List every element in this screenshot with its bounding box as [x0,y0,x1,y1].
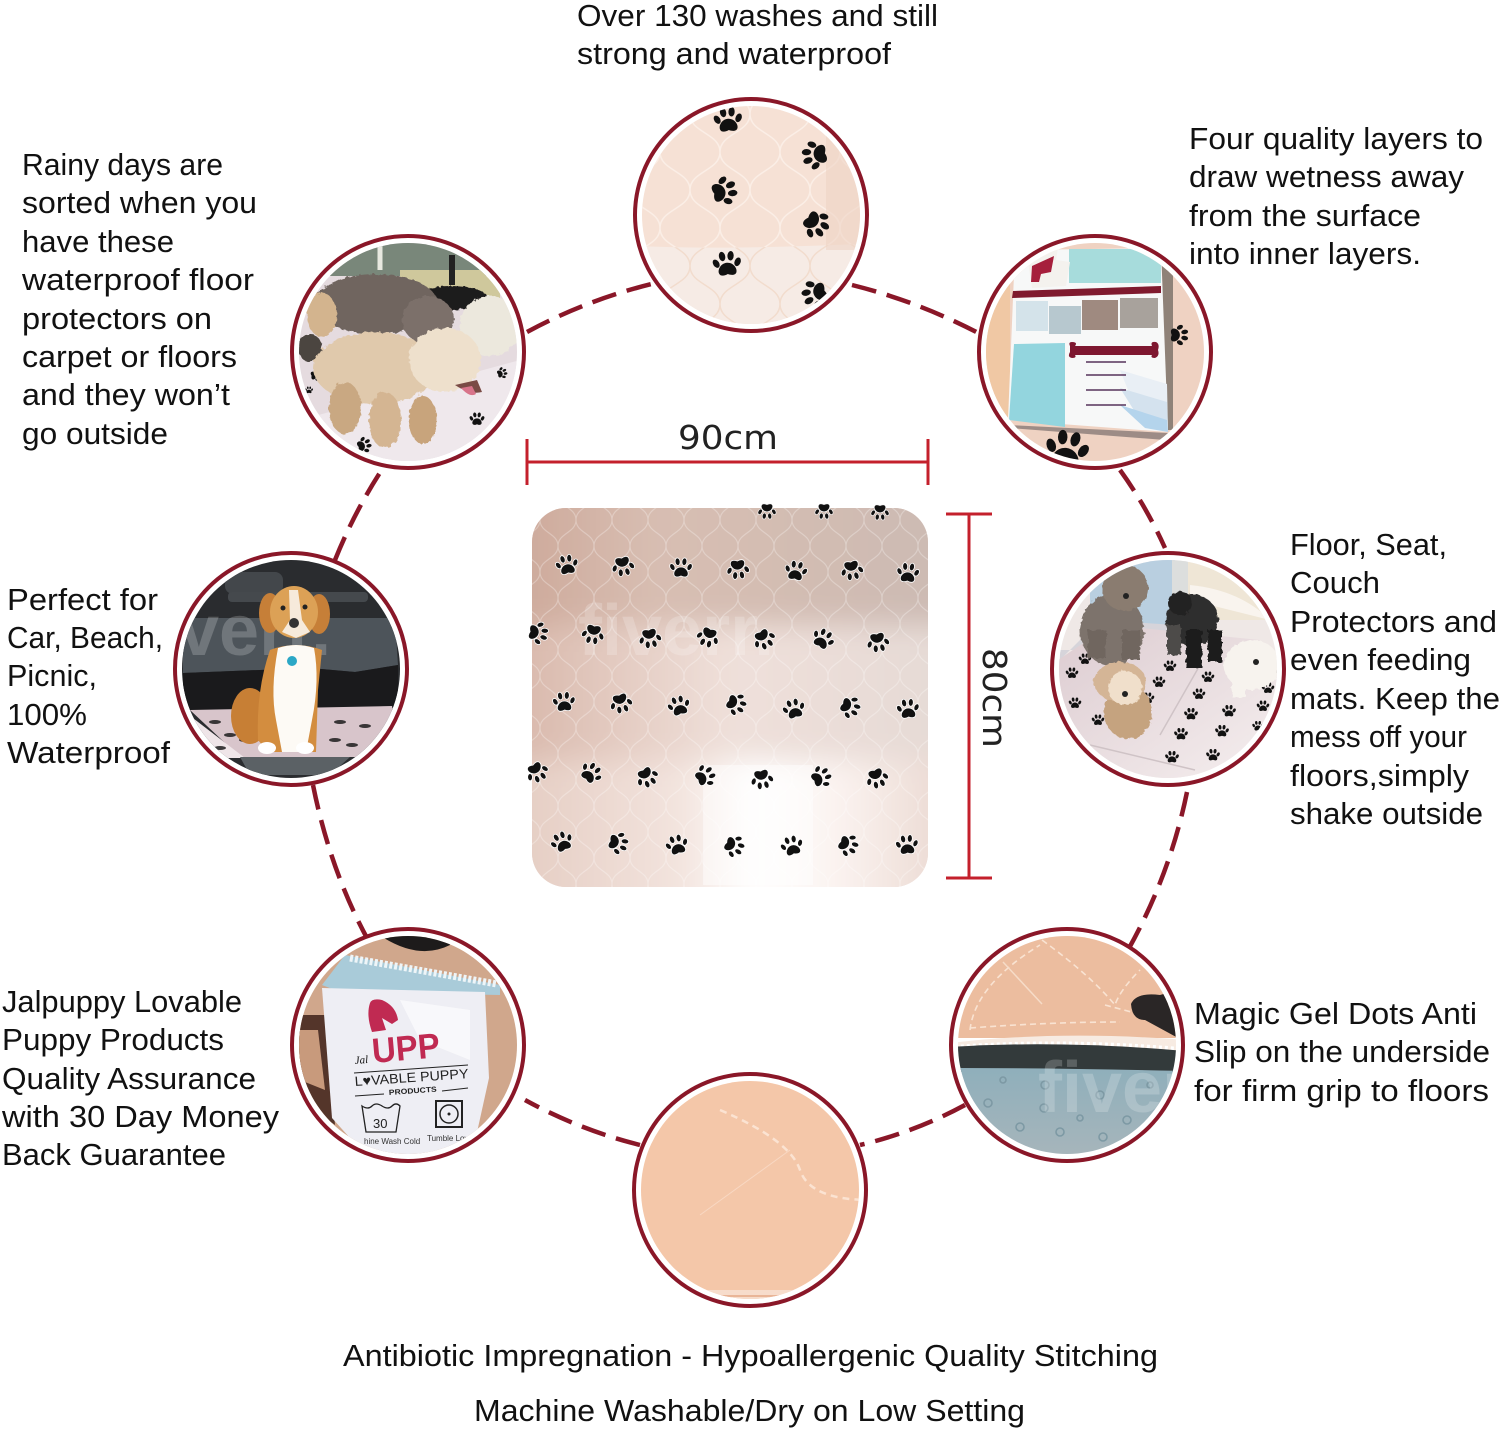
circle: product insert showing four layers [979,236,1211,471]
top left text: rainy days: waterproof floor [21,262,254,297]
left text: car beach picnic [7,582,170,770]
top left text: rainy days [21,147,257,451]
top text: washes: strong and waterproof [577,36,891,71]
top right text: layers: into inner layers. [1189,236,1421,271]
left text: car beach picnic: Car, Beach, [7,620,163,655]
brand logo [355,999,438,1064]
circle: plain peach fabric with stitching [634,1074,870,1310]
bottom left text: guarantee: Jalpuppy Lovable [2,984,242,1019]
height dimension: 80cm [946,514,1014,878]
bottom right text: gel dots [1194,996,1490,1108]
width dimension: 90cm: 90cm [678,418,778,457]
height dimension: 80cm: 80cm [975,648,1014,748]
products text: PRODUCTS [389,1085,437,1097]
circle: gel dots underside: fiverr. [1038,1048,1234,1128]
right text: floor seat couch: Floor, Seat, [1290,527,1447,562]
top left text: rainy days: protectors on [22,301,212,336]
central pad with paw print rows: fiverr. [578,591,774,671]
bottom right text: gel dots: Magic Gel Dots Anti [1194,996,1477,1031]
wash symbol: 30 [373,1116,387,1131]
circle: dogs on pad, poodles [292,236,524,470]
top left text: rainy days: have these [22,224,174,259]
top left text: rainy days: sorted when you [22,185,257,220]
right text: floor seat couch: Protectors and [1290,604,1497,639]
left text: car beach picnic: 100% [7,697,87,732]
bottom right text: gel dots: for firm grip to floors [1194,1073,1489,1108]
circle: quilted peach fabric with paws [630,99,870,331]
bottom right text: gel dots: Slip on the underside [1194,1034,1490,1069]
right text: floor seat couch: Couch [1290,565,1380,600]
width dimension: 90cm [527,418,928,485]
right text: floor seat couch: floors,simply [1290,758,1470,793]
wash symbol [362,1104,400,1132]
right text: floor seat couch [1290,527,1500,831]
bottom left text: guarantee: Quality Assurance [2,1061,256,1096]
circle: care label with brand: Tumble Low [427,1134,470,1143]
right text: floor seat couch: mess off your [1290,719,1467,754]
top right text: layers: draw wetness away [1189,159,1465,194]
top right text: layers: Four quality layers to [1189,121,1483,156]
top left text: rainy days: carpet or floors [22,339,237,374]
brand name text: L♥VABLE PUPPY [354,1066,469,1089]
top right text: layers: from the surface [1189,198,1421,233]
bottom text: impregnation and washing [343,1338,1158,1428]
bottom text: impregnation and washing: Machine Washable/Dry on Low Setting [474,1393,1025,1428]
right text: floor seat couch: shake outside [1290,796,1483,831]
brand logo: UPP [370,1026,441,1071]
circle: gel dots underside [949,927,1185,1163]
circle: beagle in car boot: fiverr. [135,591,331,671]
left text: car beach picnic: Perfect for [7,582,158,617]
bottom left text: guarantee [1,984,280,1172]
circle: beagle in car boot [173,551,409,787]
top left text: rainy days: go outside [22,416,168,451]
left text: car beach picnic: Picnic, [7,658,97,693]
circle: care label with brand [292,929,524,1162]
central pad with paw print rows [528,504,928,887]
left text: car beach picnic: Waterproof [7,735,170,770]
right text: floor seat couch: mats. Keep the [1290,681,1500,716]
bottom left text: guarantee: with 30 Day Money [1,1099,280,1134]
dashed ring connecting the circles [313,282,1187,1145]
brand logo: Jal [354,1054,369,1067]
top left text: rainy days: Rainy days are [22,147,223,182]
top right text: layers [1189,121,1483,271]
bottom left text: guarantee: Puppy Products [2,1022,224,1057]
right text: floor seat couch: even feeding [1290,642,1471,677]
dryer symbol [436,1101,462,1127]
circle: dogs on pad, indoor group [1050,553,1290,790]
circle: care label with brand: hine Wash Cold [364,1137,420,1146]
top left text: rainy days: and they won’t [22,377,230,412]
bottom text: impregnation and washing: Antibiotic Impregnation - Hypoallergenic Quality Stitching [343,1338,1158,1373]
bottom left text: guarantee: Back Guarantee [2,1137,226,1172]
top text: washes [577,0,938,71]
